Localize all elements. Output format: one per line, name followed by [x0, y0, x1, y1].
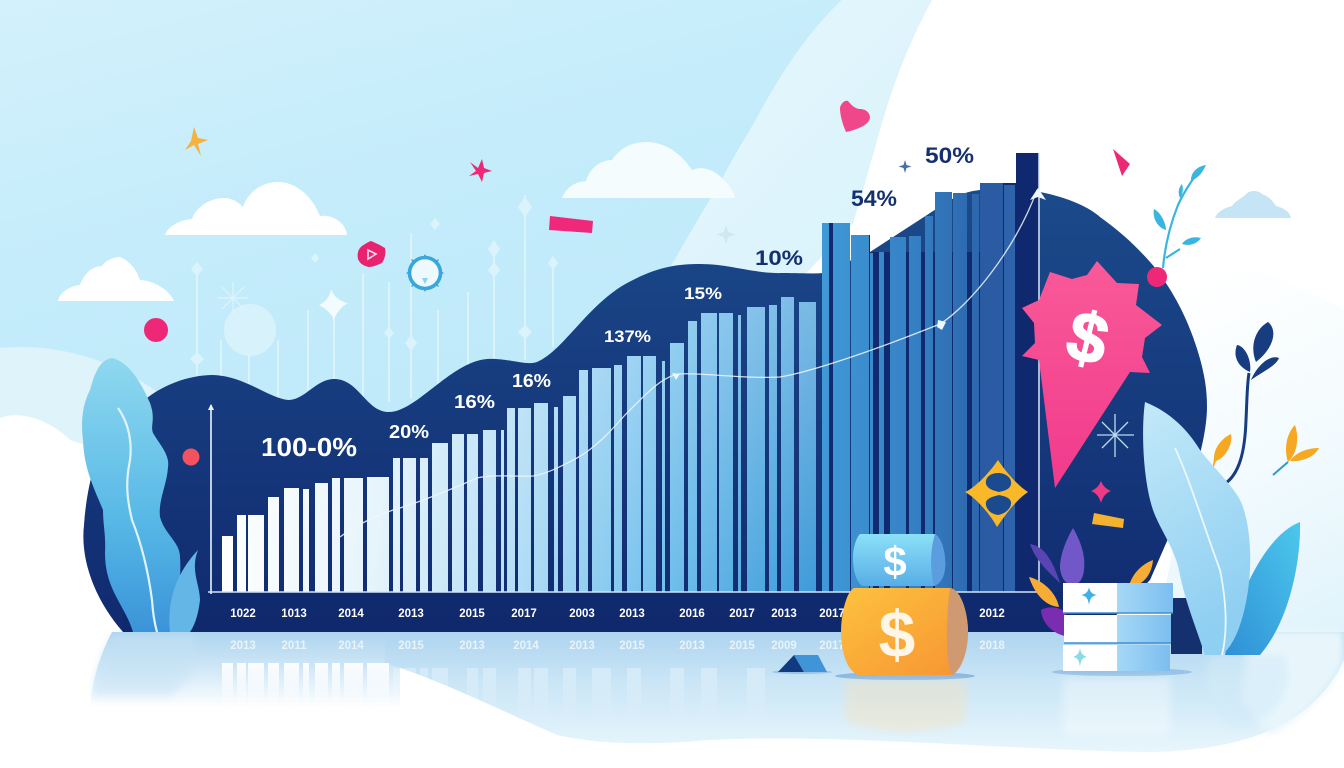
dark bar gaps — [825, 183, 1016, 592]
reflected year labels: 2015 — [729, 640, 755, 652]
dollar sign: $ — [879, 597, 915, 671]
reflected year labels: 2014 — [338, 640, 364, 652]
faint vertical sky lines with diamonds — [190, 195, 558, 402]
stack of blocks — [1052, 583, 1192, 676]
year axis labels: 1013 — [281, 608, 307, 620]
reflection of bars — [222, 663, 765, 718]
pink price badge — [1022, 261, 1162, 488]
reflected year labels: 2009 — [771, 640, 797, 652]
label 16%: 16% — [454, 392, 495, 412]
top block — [1063, 583, 1173, 613]
reflected year labels — [230, 640, 1005, 652]
sparkle — [1097, 414, 1134, 457]
reflected year labels: 2017 — [819, 640, 845, 652]
red dot left — [182, 448, 200, 466]
dollar sign: $ — [883, 538, 907, 585]
pale sparkle — [218, 282, 248, 314]
icon: pink dot — [144, 318, 168, 342]
icon: small star navy — [898, 160, 912, 173]
gold diamond icon — [965, 460, 1028, 527]
year axis labels: 2003 — [569, 608, 595, 620]
leaf vein — [1175, 448, 1226, 655]
year axis labels: 2017 — [819, 608, 845, 620]
label 100-0%: 100-0% — [261, 432, 357, 462]
icon: pink triangle — [1113, 149, 1130, 176]
icon: orange star — [185, 127, 208, 156]
year axis labels: 2017 — [729, 608, 755, 620]
icon: white four-point star — [319, 289, 348, 320]
icon: pink bar — [549, 216, 593, 233]
icon: blue ring — [406, 254, 444, 292]
stack reflection — [1063, 678, 1170, 735]
year axis labels: 2016 — [679, 608, 705, 620]
cloud large — [165, 182, 347, 235]
orange dollar cylinder — [835, 588, 975, 680]
right leaf reflection — [1207, 655, 1288, 730]
year axis labels: 2015 — [459, 608, 485, 620]
reflected year labels: 2011 — [282, 640, 307, 652]
floor with reflection — [90, 630, 1344, 752]
reflected year labels: 2015 — [398, 640, 424, 652]
left leaf reflection — [94, 634, 197, 696]
pink dot on mound edge — [1147, 267, 1167, 287]
bar chart — [222, 153, 1039, 592]
decorative icons: stars, flower, ring — [144, 101, 1130, 342]
icon: pale star — [716, 225, 736, 244]
icon: pink heart — [840, 101, 870, 132]
reflected year labels: 2013 — [569, 640, 595, 652]
label 16% upper: 16% — [512, 371, 551, 391]
axes — [208, 153, 1040, 594]
label 20%: 20% — [389, 422, 429, 442]
small blue wedge — [772, 655, 832, 674]
bottom block — [1063, 645, 1170, 671]
icon: pink star — [469, 159, 492, 182]
label 10%: 10% — [755, 247, 803, 270]
icon: pink flower — [358, 241, 385, 267]
cloud small left — [58, 257, 174, 301]
orange leaves right — [1212, 425, 1319, 475]
year axis labels: 2013 — [398, 608, 424, 620]
label 54%: 54% — [851, 186, 897, 211]
blue dollar cylinder — [853, 534, 945, 586]
purple and orange plants — [1029, 528, 1153, 636]
percentage labels — [261, 143, 974, 462]
left large leaf — [82, 358, 180, 632]
label 50%: 50% — [925, 143, 974, 168]
small left leaf — [169, 550, 200, 632]
label 137%: 137% — [604, 327, 651, 346]
tallest navy bar — [1016, 153, 1039, 592]
year axis labels: 2013 — [619, 608, 645, 620]
middle block — [1064, 615, 1171, 643]
navy mound backdrop — [83, 190, 1207, 632]
orange bar — [1092, 513, 1124, 528]
orange cylinder reflection — [845, 680, 966, 731]
reflected year labels: 2013 — [679, 640, 705, 652]
cloud centre — [562, 142, 735, 198]
bars — [222, 183, 1015, 592]
lighter bar tops — [222, 297, 816, 592]
reflected year labels: 2013 — [230, 640, 256, 652]
year axis labels: 1022 — [230, 608, 256, 620]
year axis labels: 2013 — [771, 608, 797, 620]
reflected year labels: 2015 — [619, 640, 645, 652]
pink diamond icon — [1091, 481, 1111, 503]
reflected year labels: 2018 — [979, 640, 1005, 652]
year axis labels — [230, 608, 1005, 620]
right twig with blue leaves — [1154, 165, 1206, 268]
year axis labels: 2012 — [979, 608, 1005, 620]
trend line with arrow — [340, 188, 1046, 537]
year axis labels: 2014 — [338, 608, 364, 620]
navy block behind stack — [1171, 598, 1202, 654]
year axis labels: 2017 — [511, 608, 537, 620]
leaf vein — [118, 408, 157, 632]
label 15%: 15% — [684, 284, 722, 303]
teal right leaf — [1225, 522, 1300, 655]
bottom navy band — [123, 592, 1103, 632]
pale sun circle — [224, 304, 276, 356]
reflected year labels: 2014 — [513, 640, 539, 652]
reflected year labels: 2013 — [459, 640, 485, 652]
right large leaf — [1143, 402, 1250, 655]
cloud right — [1215, 191, 1291, 218]
navy twig — [1223, 322, 1279, 485]
dollar sign: $ — [1059, 295, 1116, 381]
